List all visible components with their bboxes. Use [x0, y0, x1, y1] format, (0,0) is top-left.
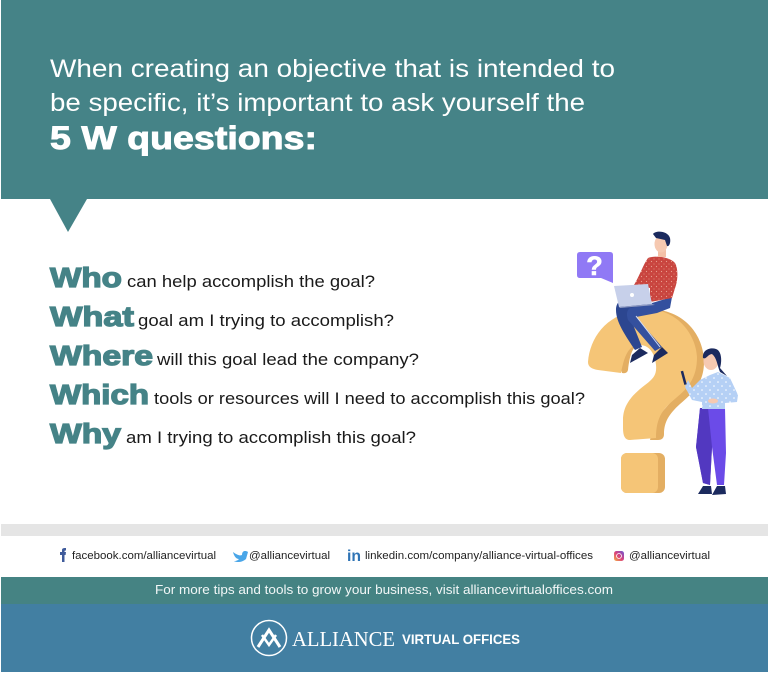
phone [681, 371, 687, 385]
sweater [685, 372, 738, 409]
question: where [50, 340, 419, 371]
header panel [1, 0, 768, 232]
question: who: Who [50, 262, 122, 293]
grey divider band [1, 524, 768, 536]
question: who [50, 262, 375, 293]
logo wordmark: VIRTUAL OFFICES [402, 631, 520, 647]
social links row [60, 548, 710, 565]
head [658, 248, 666, 257]
sweater [634, 257, 677, 302]
question: who: can help accomplish the goal? [127, 272, 375, 291]
laptop [614, 284, 652, 307]
linkedin link: in [347, 548, 361, 565]
heading: be specific, it’s important to ask yourself the [50, 89, 585, 117]
green call-to-action bar [1, 577, 768, 604]
hand [708, 398, 718, 404]
heading: 5 W questions: [50, 120, 317, 156]
man sitting with laptop [614, 232, 677, 363]
linkedin link [347, 548, 594, 565]
illustration: question mark with people [577, 232, 738, 495]
logo wordmark: ALLIANCE [292, 627, 395, 651]
question: where: will this goal lead the company? [156, 350, 419, 369]
linkedin link: linkedin.com/company/alliance-virtual-offices [365, 550, 594, 562]
question: why [50, 418, 416, 449]
logo mark [252, 620, 286, 656]
shoes [698, 486, 712, 494]
heading: When creating an objective that is intended to [50, 55, 615, 83]
twitter link: @alliancevirtual [249, 550, 330, 562]
question: which: Which [50, 379, 149, 410]
near leg [627, 297, 672, 351]
blue logo bar [1, 604, 768, 672]
facebook link: facebook.com/alliancevirtual [72, 550, 216, 562]
logo wordmark [292, 627, 520, 651]
trousers [696, 408, 726, 485]
icon: speech bubble with question mark [577, 251, 613, 283]
icon: large question mark [588, 309, 704, 493]
woman with phone [681, 348, 738, 495]
question: what [50, 301, 394, 332]
question: why: Why [50, 418, 122, 449]
green call-to-action bar: For more tips and tools to grow your business, visit alliancevirtualoffices.com [155, 582, 613, 597]
icon: speech bubble with question mark: ? [586, 251, 603, 281]
question: why: am I trying to accomplish this goal? [126, 428, 416, 447]
question: which [50, 379, 585, 410]
far shoe [630, 348, 648, 363]
question: where: Where [50, 340, 153, 371]
near shoe [652, 347, 668, 363]
question: what: goal am I trying to accomplish? [138, 311, 394, 330]
heading [50, 55, 615, 156]
far leg [616, 298, 650, 350]
instagram link: @alliancevirtual [629, 550, 710, 562]
question: what: What [50, 301, 134, 332]
question: which: tools or resources will I need to accomplish this goal? [154, 389, 585, 408]
questions list [50, 262, 585, 449]
head [704, 352, 718, 370]
